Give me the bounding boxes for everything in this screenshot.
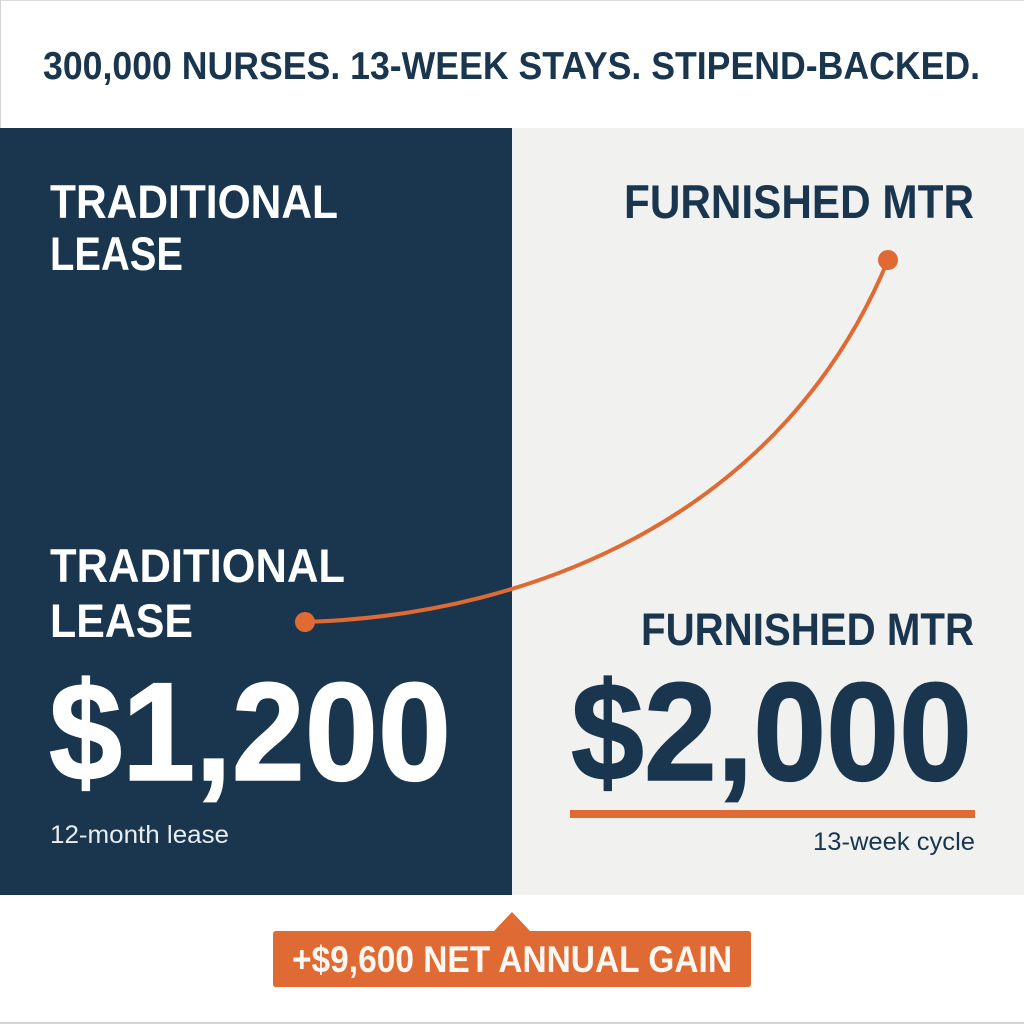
orange underline: [570, 810, 975, 818]
callout: net annual gain: [273, 912, 751, 987]
furnished term note: 13-week cycle: [813, 828, 975, 856]
furnished MTR heading, top: FURNISHED MTR: [624, 175, 974, 228]
traditional lease heading, lower: TRADITIONAL: [50, 539, 345, 592]
panel: traditional lease: [0, 128, 512, 895]
traditional rent value: $1,200: [49, 653, 451, 810]
traditional lease heading, lower: LEASE: [50, 594, 193, 647]
traditional lease heading, top: TRADITIONAL: [50, 175, 338, 228]
traditional lease heading, top: LEASE: [50, 227, 183, 280]
growth curve: [295, 250, 898, 632]
traditional term note: 12-month lease: [50, 821, 229, 849]
furnished MTR heading, lower: FURNISHED MTR: [641, 604, 974, 655]
panel: furnished MTR: [512, 128, 1024, 895]
callout: net annual gain: +$9,600 NET ANNUAL GAIN: [292, 939, 732, 980]
furnished rent value: $2,000: [571, 653, 972, 810]
